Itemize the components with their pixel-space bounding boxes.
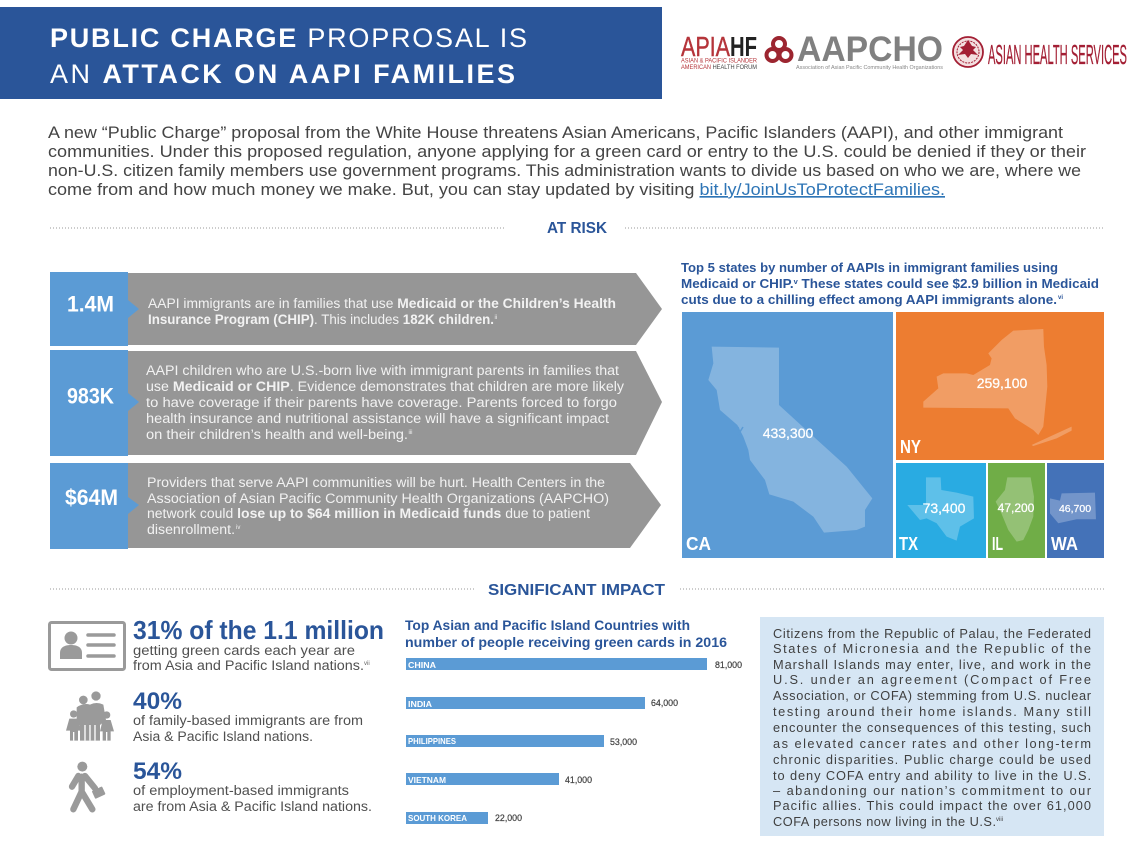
bar: China: CHINA [408,660,436,670]
title banner [0,7,662,99]
treemap heading: Top 5 states by number of AAPIs in immigrant families using [681,261,1058,275]
logo: AAPCHO: Association of Asian Pacific Community Health Organizations [796,65,943,71]
treemap heading [681,261,1099,307]
callout: COFA: chronic disparities. Public charge could be used [773,752,1091,767]
icon: family [66,691,114,741]
stat: 54 percent: 54% [133,758,182,785]
panel: 983K: to have coverage if their parents have coverage. Parents forced to forgo [146,395,617,410]
icon: id card [50,622,124,670]
stat: 54 percent: of employment-based immigrants [133,783,349,798]
treemap: Texas: 73,400 [923,500,966,516]
logo: APIAHF: HF [730,31,757,62]
callout: COFA: COFA persons now living in the U.S. [773,814,996,829]
intro paragraph: A new “Public Charge” proposal from the White House threatens Asian Americans, Pacific Islanders (AAPI), and other immigrant [48,124,1063,142]
treemap heading: cuts due to a chilling effect among AAPI immigrants alone. [681,293,1057,307]
bar: India [406,697,678,709]
callout: COFA: as elevated cancer rates and other long-term [773,736,1091,751]
bar: Philippines: 53,000 [610,737,637,747]
bar chart: green cards by country [406,658,742,824]
bar: Vietnam [406,773,592,785]
bar: South Korea: 22,000 [495,813,522,823]
stat: 31 percent: 31% of the 1.1 million [133,615,384,645]
stat: 54 percent [133,758,372,814]
logo: AAPCHO: AAPCHO [797,30,943,69]
intro paragraph [48,124,1087,199]
treemap: New York: NY [900,437,921,457]
bar chart heading [405,618,728,650]
treemap: New York: 259,100 [977,375,1028,391]
callout: COFA: encounter the consequences of this testing, such [773,720,1091,735]
panel: 983K: 983K [67,384,114,408]
callout: COFA [760,617,1104,836]
treemap: Illinois [988,463,1045,558]
callout: COFA: Citizens from the Republic of Palau, the Federated [773,626,1091,641]
title banner: AN ATTACK ON AAPI FAMILIES [50,59,515,89]
stat: 31 percent: from Asia and Pacific Island nations. [133,658,364,673]
callout: COFA: States of Micronesia and the Republic of the [773,641,1091,656]
intro paragraph: come from and how much money we make. But, you can stay updated by visiting bit.ly/JoinUsToProtectFamilies. [48,181,945,199]
intro paragraph: communities. Under this proposed regulation, anyone applying for a green card or entry to the U.S. could be denied if they or their [48,143,1087,161]
stat: 31 percent: getting green cards each year are [133,643,355,658]
treemap: Washington [1047,463,1104,558]
panel: 983K: iii [408,430,412,436]
stat: 31 percent: vii [364,661,370,667]
logo: APIAHF: AMERICAN HEALTH FORUM [681,64,757,71]
stat: 31 percent [133,615,384,673]
callout: COFA: viii [996,817,1003,823]
treemap: Texas [896,463,986,558]
panel: $64M: network could lose up to $64 million in Medicaid funds due to patient [147,506,590,521]
treemap: Texas: TX [899,534,918,554]
stat: 40 percent: 40% [133,688,182,715]
panel: 1.4M [50,272,662,346]
logo: APIAHF: APIA [681,31,730,62]
bar: China: 81,000 [715,660,742,670]
icon: walking worker [72,762,106,809]
logo: APIAHF: ASIAN & PACIFIC ISLANDER [681,58,757,64]
treemap: New York [896,312,1104,460]
callout: COFA: to deny COFA entry and ability to live in the U.S. [773,768,1091,783]
stat: 40 percent: Asia & Pacific Island nations. [133,729,313,744]
callout: COFA: – abandoning our nation’s commitment to our [773,783,1092,798]
title banner: PUBLIC CHARGE PROPROSAL IS [50,23,527,53]
bar: South Korea [406,812,522,824]
bar: Vietnam: 41,000 [565,775,592,785]
treemap: Washington: 46,700 [1059,503,1091,515]
logo: APIAHF [681,31,757,71]
treemap: California: CA [686,534,711,554]
bar: China [406,658,742,670]
panel: 1.4M: 1.4M [67,292,114,316]
treemap heading: Medicaid or CHIP. [681,277,786,291]
intro paragraph: non-U.S. citizen family members use government programs. This administration wants to divide us based on who we are, where we [48,162,1081,180]
callout: COFA: Pacific allies. This could impact the over 61,000 [773,798,1091,813]
treemap heading: v [794,279,798,286]
panel: 983K [50,350,662,456]
treemap heading: These states could see $2.9 billion in Medicaid [798,277,1099,291]
panel: $64M: Providers that serve AAPI communities will be hurt. Health Centers in the [147,475,605,490]
callout: COFA: Marshall Islands may enter, live, and work in the [773,657,1091,672]
stat: 40 percent: of family-based immigrants are from [133,713,363,728]
treemap: California [682,312,893,558]
panel: 983K: AAPI children who are U.S.-born live with immigrant parents in families that [146,363,619,378]
bar chart heading: number of people receiving green cards in 2016 [405,635,728,650]
callout: COFA: U.S. under an agreement (Compact of Free [773,672,1091,687]
panel: $64M: disenrollment. [147,522,235,537]
panel: $64M: Association of Asian Pacific Community Health Organizations (AAPCHO) [147,491,609,506]
stat: 54 percent: are from Asia & Pacific Island nations. [133,799,372,814]
panel: $64M: iv [236,525,240,531]
callout: COFA: Association, or COFA) stemming from U.S. nuclear [773,688,1092,703]
panel: 983K: on their children’s health and well-being. [146,427,408,442]
panel: 983K: health insurance and nutritional assistance will have a significant impact [146,411,609,426]
panel: 1.4M: ii [494,315,497,321]
panel: 1.4M: Insurance Program (CHIP). This includes 182K children. [148,312,494,327]
panel: 983K: use Medicaid or CHIP . Evidence demonstrates that children are more likely [146,379,624,394]
bar: India: INDIA [408,699,432,709]
callout: COFA: testing around their home islands. Many still [773,704,1091,719]
bar: India: 64,000 [651,698,678,708]
treemap: Illinois: 47,200 [998,501,1035,515]
bar: South Korea: SOUTH KOREA [408,813,467,823]
treemap: Washington: WA [1051,534,1078,554]
treemap: Illinois: IL [992,534,1003,554]
bar: Philippines: PHILIPPINES [408,736,456,746]
stat: 40 percent [133,688,363,744]
bar: Vietnam: VIETNAM [408,775,446,785]
panel: $64M: $64M [65,485,118,510]
bar: Philippines [406,735,637,747]
panel: 1.4M: AAPI immigrants are in families that use Medicaid or the Children’s Health [148,296,616,311]
heading: at risk: AT RISK [547,220,607,237]
treemap heading: vi [1058,295,1063,301]
panel: $64M [50,463,661,549]
treemap: California: 433,300 [763,425,814,441]
bar chart heading: Top Asian and Pacific Island Countries with [405,618,690,633]
heading: significant impact: SIGNIFICANT IMPACT [488,582,665,599]
